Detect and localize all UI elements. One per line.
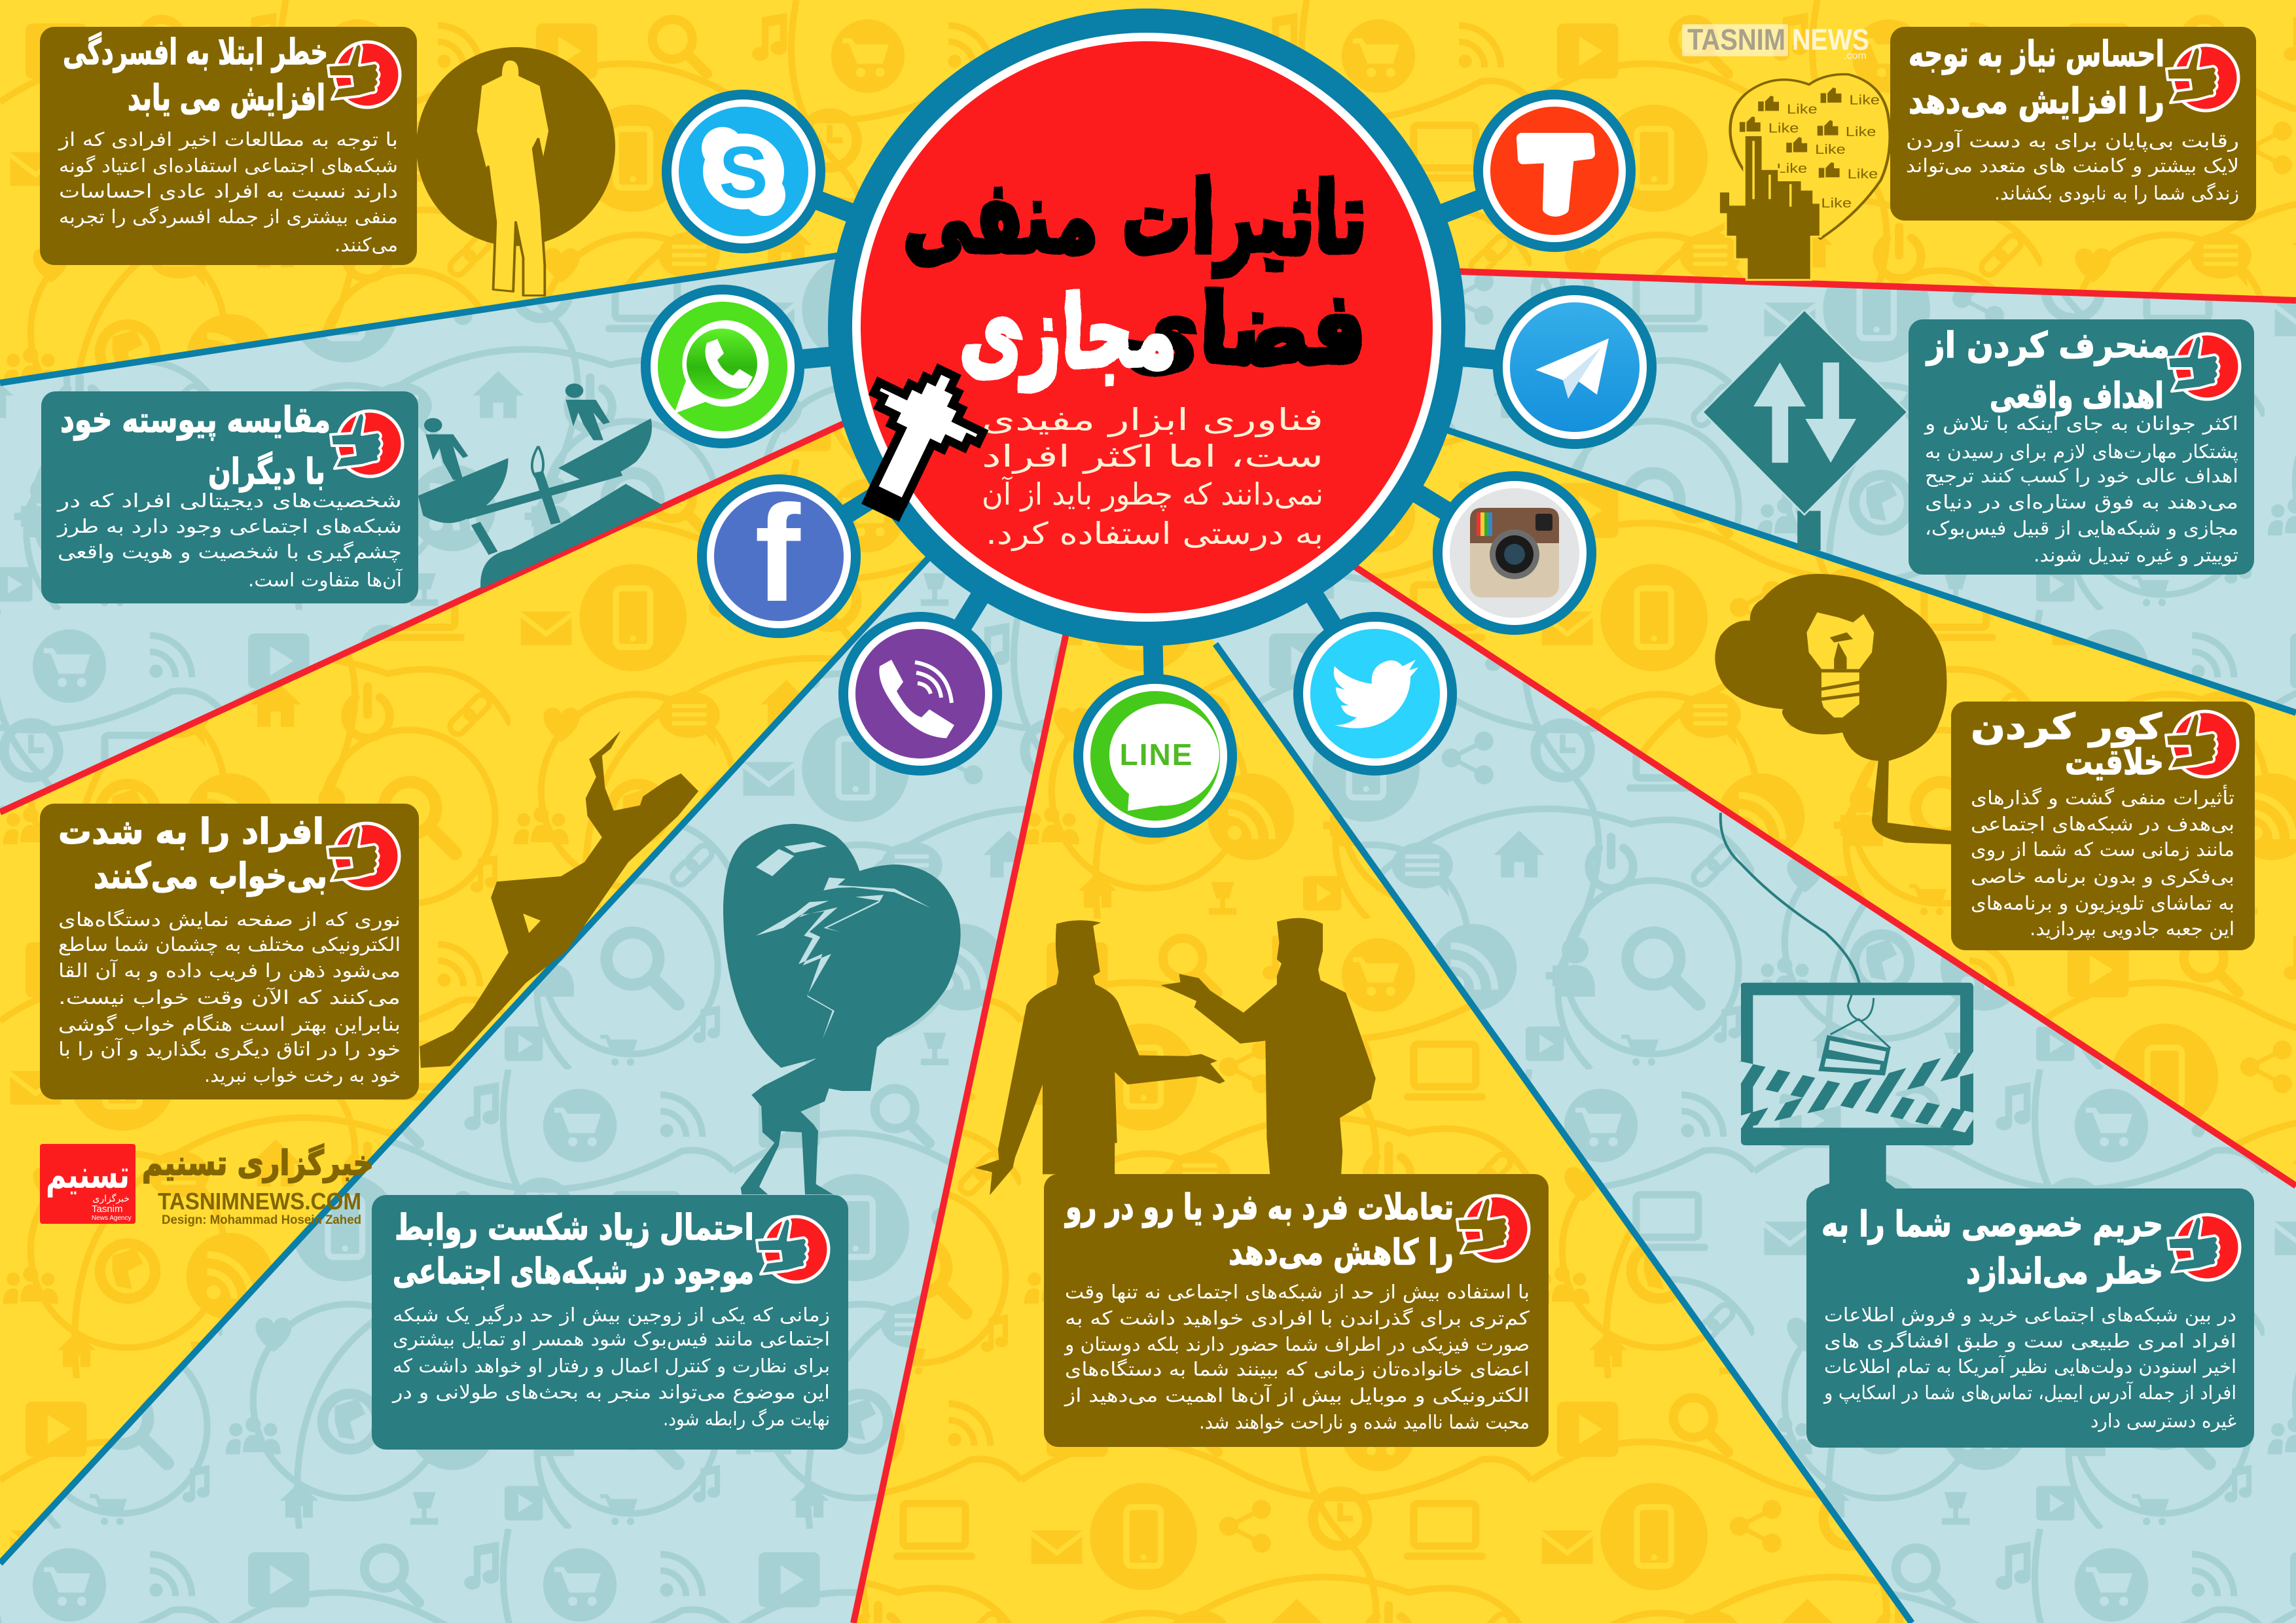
- body text: اکثر جوانان به جای اینکه با تلاش و: [1924, 412, 2238, 435]
- illustration: brain with broken light bulb: [1715, 574, 1952, 844]
- body text: اهداف عالی خود را کسب کنند ترجیح: [1925, 465, 2238, 487]
- intro text: نمی‌دانند که چطور باید از آن: [982, 476, 1323, 512]
- body text: خود را در اتاق دیگری بگذارید و آن را با: [58, 1037, 401, 1060]
- body text: این جعبه جادویی بپردازید.: [2030, 918, 2234, 940]
- heading: [393, 1207, 754, 1292]
- illustration: man walking in circle: [416, 47, 615, 295]
- icon: skype: S: [719, 132, 768, 213]
- illustration: balance scale with figures: [418, 383, 664, 589]
- illustration: heart of likes with pixel hand: [1719, 74, 1890, 280]
- icon: whatsapp: [641, 285, 804, 448]
- panel: insomnia: [40, 804, 419, 1099]
- body text: [1064, 1281, 1530, 1433]
- icon: thumb: [757, 1217, 829, 1282]
- heading: حریم خصوصی شما را به: [1821, 1204, 2163, 1245]
- panel: face to face interaction: [1044, 1174, 1549, 1447]
- panel: need for attention: [1890, 27, 2256, 221]
- panel: constant comparison: [41, 391, 418, 603]
- logo: Tasnim news agency: News Agency: [92, 1215, 132, 1222]
- body text: دارند نسبت به افراد عادی احساسات: [59, 180, 398, 202]
- main title: مجازی: [961, 276, 1176, 391]
- heading: احساس نیاز به توجه: [1909, 33, 2164, 75]
- body text: محبت شما ناامید شده و ناراحت خواهند شد.: [1199, 1411, 1530, 1433]
- watermark: Tasnim News: .com: [1844, 50, 1867, 62]
- icon: thumb: [327, 823, 399, 889]
- illustration: two men talking: [975, 918, 1376, 1195]
- body text: شخصیت‌های دیجیتالی افراد که در: [56, 490, 402, 512]
- icon: twitter: [1293, 612, 1457, 776]
- body text: خود به رخت خواب نبرید.: [204, 1064, 401, 1086]
- logo: Tasnim news agency: [40, 1143, 374, 1227]
- icon: tango T: [1473, 90, 1636, 252]
- body text: لایک بیشتر و کامنت های متعدد می‌تواند: [1906, 154, 2239, 177]
- heading: خطر می‌اندازد: [1966, 1251, 2163, 1292]
- body text: می‌کنند که الآن وقت خواب نیست.: [58, 986, 401, 1008]
- panel: relationship breakup: [372, 1195, 848, 1450]
- panel: depression risk: [40, 27, 417, 265]
- icon: thumb: [1457, 1196, 1529, 1261]
- illustration: person carrying broken heart: [723, 824, 961, 1194]
- body text: رقابت بی‌پایان برای به دست آوردن: [1906, 129, 2239, 152]
- body text: [391, 1304, 830, 1430]
- logo: Tasnim news agency: Tasnim: [92, 1204, 123, 1215]
- heading: منحرف کردن از: [1925, 325, 2170, 366]
- body text: شبکه‌های اجتماعی استفاده‌ای اعتیاد گونه: [59, 154, 398, 177]
- heading: تعاملات فرد به فرد یا رو در رو: [1064, 1186, 1454, 1228]
- body text: اخیر اسنودن دولت‌هایی نظیر آمریکا به تمام اطلاعات: [1824, 1355, 2236, 1378]
- icon: viber: [838, 612, 1002, 776]
- illustration: climber silhouette: [420, 731, 698, 1068]
- icon: instagram: [1433, 471, 1596, 635]
- intro text: ست، اما اکثر افراد: [982, 438, 1323, 474]
- icon: thumb: [2166, 711, 2238, 777]
- body text: در بین شبکه‌های اجتماعی خرید و فروش اطلاعات: [1824, 1304, 2236, 1326]
- body text: غیره دسترسی دارد: [2090, 1410, 2236, 1432]
- watermark: Tasnim News: [1682, 23, 1869, 62]
- body text: پشتکار مهارت‌های لازم برای رسیدن به: [1925, 440, 2238, 463]
- intro text: به درستی استفاده کرد.: [986, 516, 1323, 552]
- panel: blinding creativity: [1951, 702, 2255, 950]
- illustration: heart of likes with pixel hand: Like: [1787, 101, 1818, 116]
- logo: Tasnim news agency: Design: Mohammad Hosein Zahed: [162, 1213, 361, 1227]
- body text: نهایت مرگ رابطه شود.: [663, 1408, 830, 1430]
- heading: اهداف واقعی: [1990, 375, 2164, 416]
- watermark: Tasnim News: NEWS: [1792, 23, 1869, 56]
- watermark: Tasnim News: TASNIM: [1687, 23, 1785, 56]
- main title: فضای: [1123, 273, 1367, 387]
- body text: چشم‌گیری با شخصیت و هویت واقعی: [58, 541, 402, 563]
- body text: مانند زمانی ست که شما از روی: [1971, 838, 2234, 861]
- icon: thumb: [331, 411, 403, 476]
- icon: thumb: [328, 42, 400, 107]
- heading: احتمال زیاد شکست روابط: [395, 1207, 754, 1248]
- icon: telegram: [1493, 285, 1657, 449]
- body text: [58, 128, 398, 256]
- body text: [1906, 129, 2239, 204]
- body text: منفی بیشتری از جمله افسردگی را تجربه: [59, 205, 398, 228]
- body text: زندگی شما را به نابودی بکشاند.: [1994, 182, 2239, 204]
- body text: با استفاده بیش از حد از شبکه‌های اجتماعی نه تنها وقت: [1065, 1281, 1530, 1303]
- heading: کور کردن: [1971, 706, 2162, 747]
- intro text: فناوری ابزار مفیدی: [982, 402, 1323, 438]
- body text: می‌شود ذهن را فریب داده و به آن القا: [58, 959, 401, 982]
- heading: خطر ابتلا به افسردگی: [63, 31, 328, 73]
- body text: بی‌فکری و بدون برنامه خاصی: [1971, 865, 2234, 887]
- body text: [56, 490, 403, 591]
- body text: افراد امری طبیعی ست و طبق افشاگری های: [1824, 1330, 2236, 1352]
- body text: شبکه‌های اجتماعی وجود دارد به طرز: [56, 515, 402, 537]
- illustration: heart of likes with pixel hand: Like: [1768, 120, 1799, 135]
- body text: الکترونیکی مختلف به چشمان شما ساطع: [58, 933, 401, 955]
- illustration: heart of likes with pixel hand: Like: [1848, 166, 1878, 181]
- illustration: heart of likes with pixel hand: Like: [1849, 92, 1880, 107]
- body text: این موضوع می‌تواند منجر به بحث‌های طولانی و در: [391, 1381, 830, 1403]
- body text: الکترونیکی و موبایل بیش از آن‌ها اهمیت می‌دهید از: [1064, 1383, 1530, 1406]
- body text: تأثیرات منفی گشت و گذارهای: [1971, 784, 2234, 809]
- heading: [58, 811, 327, 897]
- body text: افراد از جمله آدرس ایمیل، تماس‌های شما در اسکایپ و: [1823, 1381, 2236, 1404]
- heading: [1971, 706, 2164, 783]
- heading: افزایش می یابد: [128, 77, 325, 118]
- illustration: heart of likes with pixel hand: Like: [1815, 141, 1846, 156]
- icon: line: [1073, 674, 1237, 838]
- intro text: [982, 402, 1323, 552]
- icon: facebook: [697, 474, 861, 638]
- heading: با دیگران: [208, 451, 325, 492]
- logo: Tasnim news agency: خبرگزاری: [92, 1193, 130, 1204]
- body text: به تماشای تلویزیون و برنامه‌های: [1971, 892, 2234, 914]
- heading: [1909, 33, 2164, 122]
- heading: خلاقیت: [2065, 741, 2164, 783]
- illustration: heart of likes with pixel hand: Like: [1776, 160, 1807, 175]
- panel: deviation from real goals: [1909, 319, 2254, 575]
- main title: تاثیرات منفی: [903, 162, 1367, 276]
- body text: [1971, 784, 2234, 940]
- icon: thumb: [2168, 334, 2240, 399]
- icon: skype: [662, 90, 825, 253]
- illustration: traffic sign: [1702, 310, 1907, 550]
- body text: می‌دهند به فوق ستاره‌ای در دنیای: [1925, 491, 2238, 513]
- heading: موجود در شبکه‌های اجتماعی: [393, 1251, 754, 1292]
- logo: Tasnim news agency: تسنیم: [46, 1152, 130, 1198]
- body text: اعضای خانواده‌تان زمانی که ببینند شما به دستگاه‌های: [1065, 1358, 1530, 1380]
- central hub circle: [828, 9, 1465, 646]
- illustration: heart of likes with pixel hand: Like: [1821, 195, 1852, 210]
- body text: بنابراین بهتر است هنگام خواب گوشی: [58, 1013, 401, 1035]
- heading: افراد را به شدت: [58, 811, 324, 852]
- body text: با توجه به مطالعات اخیر افرادی که از: [58, 128, 398, 151]
- icon: thumb: [2168, 1215, 2240, 1280]
- logo: Tasnim news agency: خبرگزاری تسنیم: [142, 1143, 374, 1183]
- heading: را کاهش می‌دهد: [1229, 1232, 1454, 1273]
- body text: اجتماعی مانند فیس‌بوک شود همسر او تمایل بیشتری: [393, 1328, 830, 1350]
- heading: را افزایش می‌دهد: [1909, 80, 2164, 122]
- connectors between hub and social icons: [723, 171, 1575, 756]
- logo: Tasnim news agency: TASNIMNEWS.COM: [158, 1188, 361, 1215]
- heading: [60, 399, 331, 492]
- body text: می‌کنند.: [334, 234, 398, 256]
- heading: بی‌خواب می‌کنند: [94, 855, 327, 897]
- heading: [63, 31, 328, 118]
- illustration: heart of likes with pixel hand: Like: [1846, 124, 1876, 139]
- body text: [58, 908, 401, 1086]
- body text: مجازی و شبکه‌هایی از قبیل فیس‌بوک،: [1925, 517, 2238, 539]
- body text: برای نظارت و کنترل اعمال و رفتار او خواهد داشت که: [393, 1355, 830, 1377]
- body text: توییتر و غیره تبدیل شوند.: [2034, 544, 2238, 566]
- heading: [1821, 1204, 2163, 1292]
- panel: privacy at risk: [1806, 1188, 2254, 1448]
- body text: [1924, 412, 2238, 566]
- body text: نوری که از صفحه نمایش دستگاه‌های: [58, 908, 401, 931]
- heading: [1064, 1186, 1454, 1273]
- body text: بی‌هدف در شبکه‌های اجتماعی: [1971, 813, 2234, 835]
- main title: [903, 162, 1367, 391]
- body text: [1823, 1304, 2236, 1432]
- body text: زمانی که یکی از زوجین بیش از حد درگیر یک شبکه: [393, 1304, 830, 1326]
- icon: thumb: [2166, 45, 2238, 111]
- body text: کم‌تری برای گذراندن با افرادی خواهید داشت که به: [1065, 1307, 1530, 1330]
- heading: [1925, 325, 2170, 416]
- icon: line: LINE: [1120, 738, 1193, 772]
- heading: مقایسه پیوسته خود: [60, 399, 331, 440]
- illustration: monitor with crane and tape: [1721, 813, 1990, 1198]
- body text: آن‌ها متفاوت است.: [248, 568, 403, 591]
- icon: facebook: f: [755, 476, 801, 630]
- body text: صورت فیزیکی در اطراف شما حضور دارند بلکه دوستان و: [1064, 1333, 1530, 1355]
- pixel cursor: [829, 348, 999, 538]
